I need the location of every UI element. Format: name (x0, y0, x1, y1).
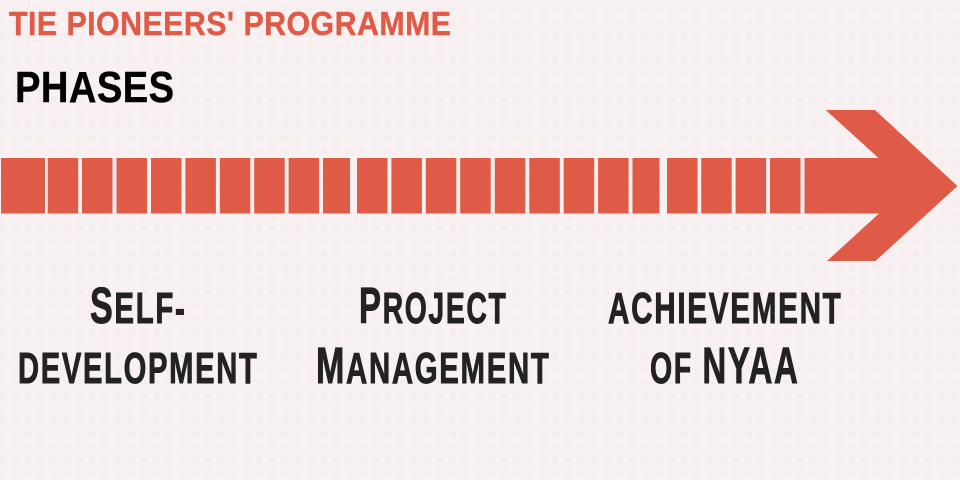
label: achievement of NYAA: ACHIEVEMENT (608, 284, 842, 333)
label: achievement of NYAA: OF NYAA (650, 337, 800, 394)
label: project management: PROJECT (359, 277, 508, 334)
label: self-development: SELF- (90, 277, 186, 334)
heading: phases: PHASES (15, 63, 174, 112)
segmented arrow (1, 110, 958, 261)
label: self-development: DEVELOPMENT (18, 344, 258, 393)
label: achievement of NYAA (608, 284, 842, 394)
label: project management (316, 277, 550, 394)
label: project management: MANAGEMENT (316, 337, 550, 394)
label: self-development (18, 277, 258, 393)
title: TIE PIONEERS' PROGRAMME (9, 5, 452, 42)
